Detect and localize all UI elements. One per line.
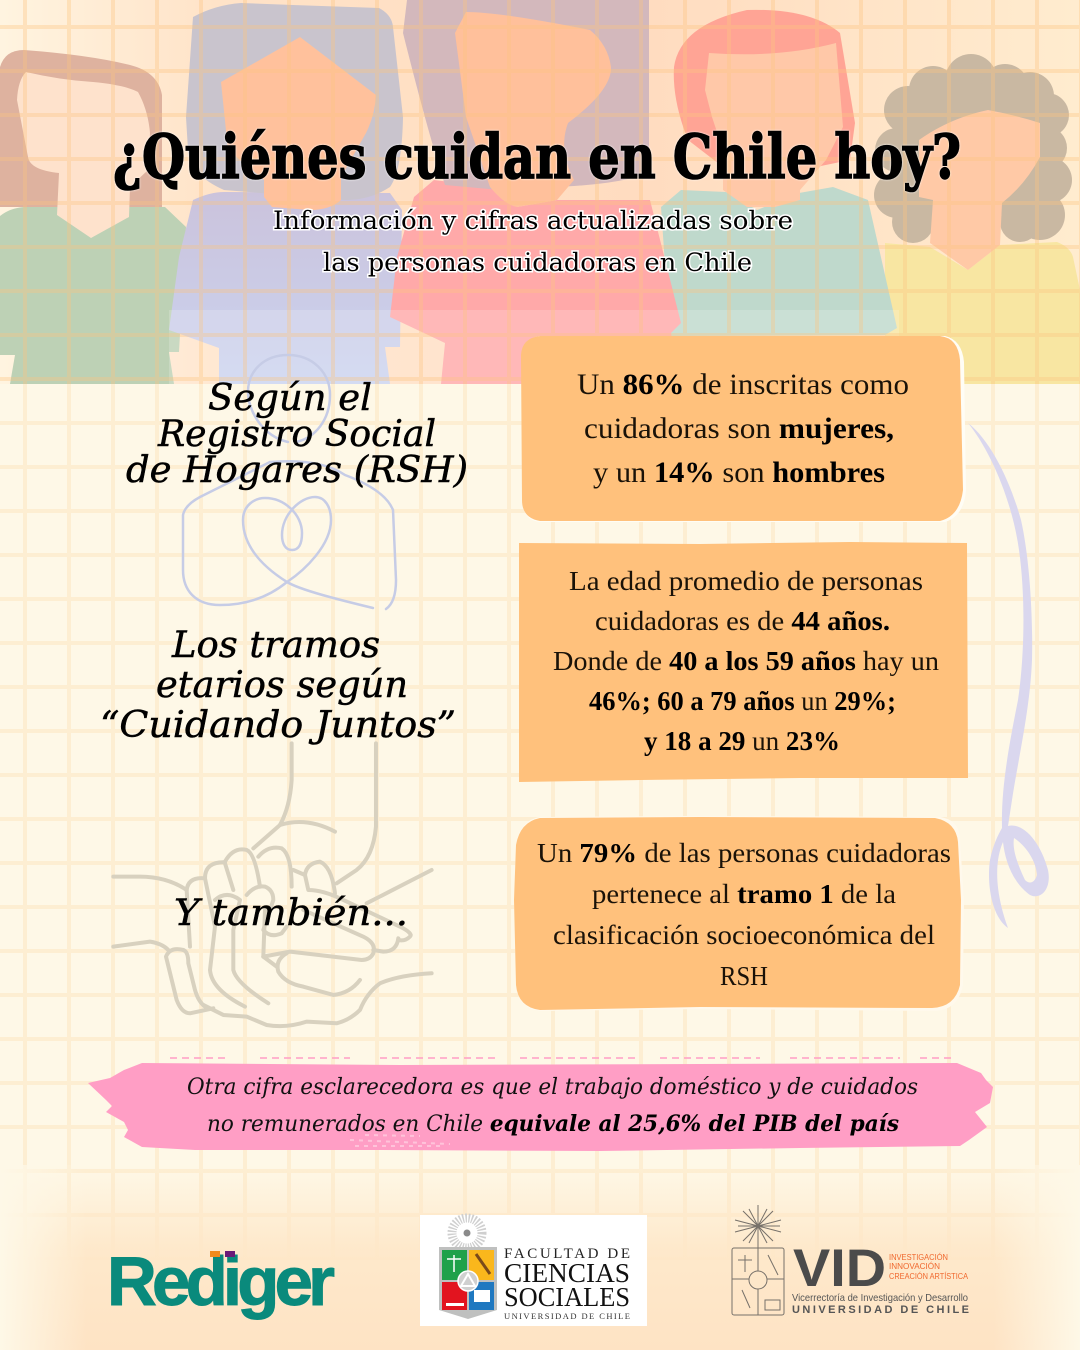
person: grey hair woman, lavender shirt	[169, 3, 403, 384]
icon: university crest	[439, 1218, 497, 1319]
label: Según el Registro Social de Hogares	[126, 378, 468, 491]
label: Según el Registro Social de Hogares: Según el	[208, 378, 372, 419]
logo: VID Universidad de Chile: VID	[793, 1239, 886, 1298]
logo: Rediger: Rediger	[107, 1243, 335, 1320]
panel: age ranges: y 18 a 29 un 23%	[644, 726, 840, 756]
text: 79% tramo 1: Un 79% de las personas cuidadoras	[537, 838, 951, 868]
panel: socioeconomic tramo	[514, 816, 964, 1011]
decorative squiggle ribbon	[968, 423, 1049, 928]
panel: RSH statistics: y un 14% son hombres	[593, 456, 885, 489]
callout: pink brush band 25,6% PIB	[88, 1058, 993, 1151]
panel: socioeconomic tramo: clasificación socioeconómica del	[553, 920, 935, 950]
logo: Facultad de Ciencias Sociales: CIENCIAS	[504, 1258, 630, 1288]
callout: pink brush band 25,6% PIB: no remunerados en Chile equivale al 25,6% del PIB del país	[207, 1111, 899, 1137]
icon: star and shield	[732, 1205, 784, 1315]
panel: age ranges	[519, 542, 968, 782]
bottom peach fade	[0, 1165, 1080, 1350]
label: Según el Registro Social de Hogares: Registro Social	[157, 414, 436, 455]
subtitle	[273, 206, 793, 277]
person: curly hair woman, yellow shirt	[874, 54, 1080, 384]
line art: person hugging heart	[183, 355, 396, 609]
label: Según el Registro Social de Hogares: de Hogares (RSH)	[126, 450, 468, 491]
text: 86% women: Un 86% de inscritas como	[577, 368, 909, 401]
label: Los tramos etarios: Los tramos	[171, 625, 380, 666]
logo: VID Universidad de Chile	[732, 1205, 969, 1316]
label: Y también: Y también...	[174, 893, 408, 934]
logo: VID Universidad de Chile: INNOVACIÓN	[889, 1262, 940, 1271]
person: red hair woman, teal shirt	[661, 10, 897, 336]
panel: socioeconomic tramo: pertenece al tramo 1 de la	[592, 879, 896, 909]
panel: RSH statistics: cuidadoras son mujeres,	[584, 412, 894, 445]
logo: VID Universidad de Chile: UNIVERSIDAD DE CHILE	[792, 1304, 969, 1316]
text: average age: La edad promedio de personas	[569, 566, 923, 596]
label: Los tramos etarios: “Cuidando Juntos”	[100, 705, 456, 746]
logo: VID Universidad de Chile: INVESTIGACIÓN	[889, 1253, 948, 1262]
panel: age ranges: 46%; 60 a 79 años un 29%;	[589, 686, 896, 716]
label: Los tramos etarios	[100, 625, 456, 746]
text: callout sentence: Otra cifra esclarecedora es que el trabajo doméstico y de cuidados	[187, 1075, 918, 1100]
panel: age ranges: Donde de 40 a los 59 años hay un	[553, 646, 940, 676]
panel: socioeconomic tramo: RSH	[720, 961, 768, 991]
logo: Facultad de Ciencias Sociales: UNIVERSIDAD DE CHILE	[504, 1311, 630, 1321]
line art: caring hands	[113, 743, 432, 1026]
logo: Facultad de Ciencias Sociales: FACULTAD DE	[504, 1246, 630, 1262]
panel: RSH statistics	[521, 336, 966, 522]
logo: Facultad de Ciencias Sociales	[420, 1215, 647, 1326]
label: Los tramos etarios: etarios según	[156, 665, 408, 706]
subtitle: las personas cuidadoras en Chile	[323, 248, 752, 277]
subtitle: Información y cifras actualizadas sobre	[273, 206, 793, 235]
person: long hair woman, pink shirt	[390, 0, 681, 384]
person: brown hair woman, green shirt	[0, 50, 186, 384]
logo: VID Universidad de Chile: CREACIÓN ARTÍSTICA	[889, 1272, 969, 1281]
logo: Facultad de Ciencias Sociales: SOCIALES	[504, 1282, 630, 1312]
panel: age ranges: cuidadoras es de 44 años.	[595, 606, 890, 636]
illustration: group of five women caregivers	[0, 0, 1080, 384]
logo: VID Universidad de Chile: Vicerrectoría de Investigación y Desarrollo	[792, 1292, 968, 1304]
